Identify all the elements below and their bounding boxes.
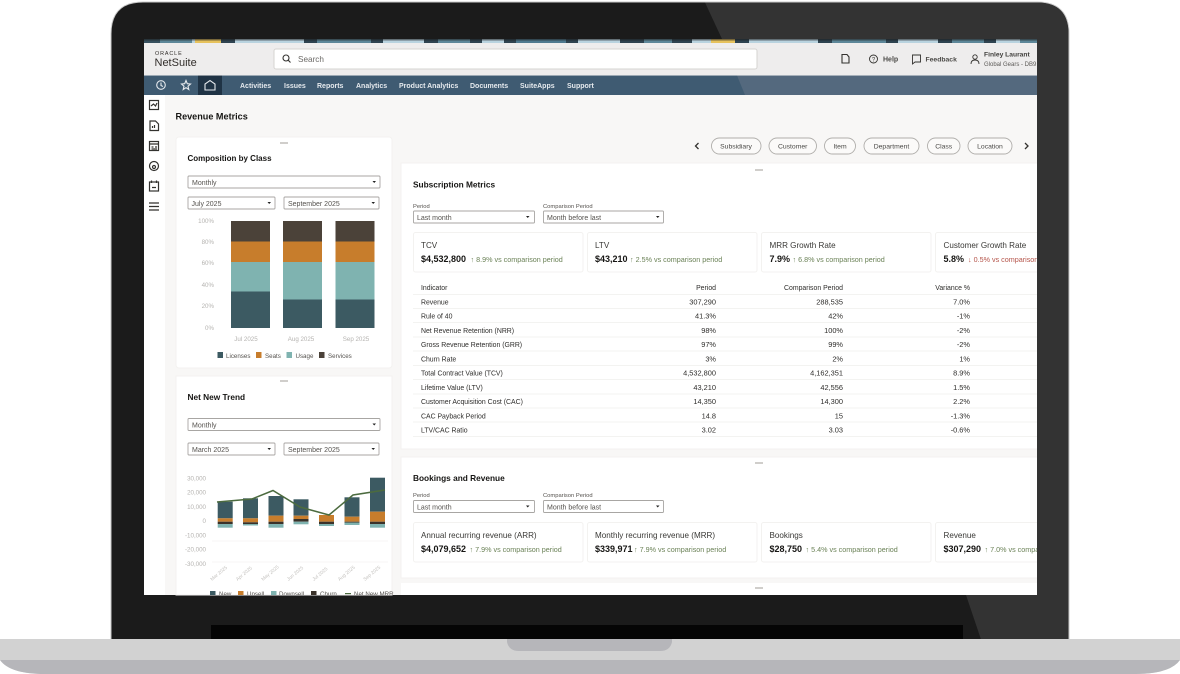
table rows: Lifetime Value (LTV) [421,385,483,392]
table rows: Total Contract Value (TCV) [421,370,503,378]
dropdown: end [284,443,379,455]
KPI card: MRR: Monthly recurring revenue (MRR) [595,531,715,540]
panel: composition by class [176,137,392,368]
period filter: Last month [417,504,452,512]
stacked bar chart: 40% [202,282,214,289]
legend: Usage [296,353,314,360]
period filter: Last month [417,215,452,222]
dropdown: end: September 2025 [288,201,340,208]
panel: net new trend [176,376,394,598]
table rows: -0.6% [951,426,970,434]
nav labels: Documents [470,83,508,90]
period filter [413,204,534,223]
dropdown: start: July 2025 [192,201,222,208]
panel: next section, cut off [401,583,1037,595]
dropdown: start [188,443,275,455]
header bar [144,43,1037,75]
filter pills: Subsidiary [720,144,752,150]
KPI card: LTV: $43,210 [595,254,628,264]
nav labels: Analytics [356,83,387,90]
table rows: Customer Acquisition Cost (CAC) [421,399,523,406]
table rows: 3% [705,354,716,364]
stacked bar chart: 0% [205,325,214,332]
stacked bar chart: 60% [202,260,214,267]
table rows: 41.3% [695,312,716,320]
KPI card: LTV: ↑ 2.5% vs comparison period [630,255,722,264]
nav labels [240,83,594,90]
comparison period filter: Month before last [547,215,601,222]
table rows: Gross Revenue Retention (GRR) [421,342,522,349]
table rows: 14.8 [702,412,716,420]
table rows: -2% [957,326,970,335]
table rows: LTV/CAC Ratio [421,428,468,434]
comparison period filter: Month before last [547,504,601,512]
filter pills [696,138,1028,154]
decorative top banner [144,39,1037,43]
legend, clipped by screen edge: Downsell [279,591,304,598]
stacked bar chart: Aug 2025 [288,336,315,343]
dropdown: frequency [188,176,380,188]
table rows: 288,535 [816,298,843,306]
table rows: 307,290 [689,298,716,306]
filter pills: Customer [778,144,808,150]
help: Help [883,56,898,64]
filter pills: Item [833,144,847,150]
dropdown: end [284,197,379,209]
table rows: 14,350 [693,397,716,406]
stacked bar chart: 100% [198,218,214,225]
table header: Variance % [935,285,970,292]
combo chart: -30,000 [185,561,207,568]
KPI card: customer growth, clipped: ↓ 0.5% vs comparison period [968,255,1060,264]
panel: bookings and revenue [402,458,1037,578]
KPI card: bookings: Bookings [770,531,803,540]
table rows: Rule of 40 [421,314,453,320]
user: Finley Laurant [984,52,1030,58]
legend, clipped by screen edge: New [219,591,232,598]
KPI card: bookings: $28,750 [770,544,802,554]
user [971,52,1037,68]
laptop lid [111,2,1069,640]
stacked bar chart: 20% [202,303,214,310]
line: net new MRR [217,490,385,515]
KPI card: LTV: LTV [595,241,610,250]
combo chart: 0 [203,518,207,525]
combo chart: -10,000 [185,532,207,540]
icon: document [842,54,849,63]
legend, clipped by screen edge [210,591,394,595]
KPI card: TCV: ↑ 8.9% vs comparison period [470,255,563,264]
table rows: 99% [828,340,843,349]
legend [218,352,352,360]
dropdown: frequency: Monthly [192,180,217,187]
table rows: CAC Payback Period [421,414,486,420]
KPI card: MRR growth: ↑ 6.8% vs comparison period [792,255,885,264]
navigation bar [144,76,1037,95]
combo chart [185,476,394,598]
KPI card: ARR: Annual recurring revenue (ARR) [421,531,537,540]
table rows: Revenue [421,300,449,306]
combo chart: 10,000 [187,504,207,511]
nav labels: Activities [240,83,271,90]
month labels [209,564,382,583]
legend: Licenses [226,353,250,360]
filter pills: Department [874,144,909,150]
table rows: 42,556 [820,383,843,392]
logo: ORACLE [155,51,183,57]
KPI card: bookings [762,522,931,562]
table rows: 42% [828,312,843,320]
table rows: 2% [832,354,843,364]
KPI card: customer growth, clipped: 5.8% [944,254,964,264]
heading: Bookings and Revenue [413,473,505,483]
help: ? [872,58,876,64]
table rows: 97% [701,340,716,349]
legend, clipped by screen edge: Churn [320,591,337,598]
filter pills: Class [935,144,953,150]
nav labels: Issues [284,83,306,90]
KPI card: TCV: $4,532,800 [421,254,466,264]
legend: Services [328,353,352,360]
table rows: 1.5% [953,383,970,392]
legend: Seats [265,353,281,360]
screen [144,39,1105,598]
dropdown: start [188,197,275,209]
period filter: Period [413,204,430,210]
table rows: 43,210 [693,383,716,392]
month labels: Aug 2025 [337,565,357,583]
KPI card: revenue, clipped [935,522,1037,562]
KPI card: customer growth, clipped: Customer Growth Rate [944,241,1027,250]
KPI card: revenue, clipped: Revenue [944,531,976,540]
help [870,55,898,64]
nav labels: SuiteApps [520,83,555,90]
heading: Composition by Class [188,154,272,163]
month labels: Sep 2025 [362,565,382,583]
period filter: Period [413,493,430,499]
comparison period filter [543,204,664,223]
month labels: Jun 2025 [286,565,305,583]
table header: Comparison Period [784,285,843,292]
feedback [912,55,957,64]
table rows: Net Revenue Retention (NRR) [421,328,514,335]
KPI card: customer growth, clipped [935,232,1037,272]
table rows: 100% [824,326,843,335]
KPI card: bookings: ↑ 5.4% vs comparison period [806,545,898,554]
KPI card: MRR: $339,971 [595,544,633,554]
comparison period filter [543,493,664,512]
table rows: 3.03 [829,426,843,434]
month labels: Jul 2025 [311,566,329,583]
stacked bar chart: Jul 2025 [234,336,258,343]
month labels: Mar 2025 [209,565,229,583]
table rows: 7.0% [953,298,970,306]
table rows: 15 [835,412,843,420]
table rows: 4,162,351 [810,368,843,378]
dropdown: frequency: Monthly [192,422,217,430]
table rows: 8.9% [953,368,970,378]
filter pills: Location [977,144,1003,150]
table rows: 1% [959,354,970,364]
KPI card: MRR [588,522,757,562]
heading: Subscription Metrics [413,180,495,190]
laptop base [0,639,1180,674]
panel: subscription metrics [402,164,1037,448]
nav labels: Product Analytics [399,83,458,90]
KPI card: MRR growth [762,232,931,272]
table rows: 2.2% [953,397,970,406]
table rows: -1% [957,312,970,320]
KPI card: MRR: ↑ 7.9% vs comparison period [634,545,726,554]
KPI card: ARR: ↑ 7.9% vs comparison period [470,545,562,554]
KPI card: revenue, clipped: $307,290 [944,544,981,554]
indicators table [413,285,1037,436]
search box [274,49,757,69]
table rows: 98% [701,326,716,335]
month labels: May 2025 [260,564,281,583]
table rows: 4,532,800 [683,368,716,378]
user: Global Gears - DB9 [984,62,1037,68]
comparison period filter: Comparison Period [543,493,593,499]
KPI card: revenue, clipped: ↑ 7.0% vs comparison period [984,545,1077,554]
table rows: 3.02 [702,426,716,434]
stacked bar chart: Sep 2025 [343,336,370,343]
table header: Indicator [421,285,448,292]
comparison period filter: Comparison Period [543,204,593,210]
KPI card: ARR [414,522,583,562]
combo chart: 20,000 [187,490,207,496]
legend, clipped by screen edge: Upsell [247,591,264,598]
bars [218,478,385,528]
period filter [413,493,534,512]
stacked bar chart [198,218,374,343]
month labels: Apr 2025 [235,565,254,583]
table header: Period [696,285,716,292]
dropdown: end: September 2025 [288,447,340,454]
KPI card: MRR growth: 7.9% [770,254,790,264]
sidebar [144,95,165,595]
combo chart: -20,000 [185,546,207,554]
KPI card: LTV [588,232,757,272]
KPI card: MRR growth: MRR Growth Rate [770,241,836,250]
combo chart: 30,000 [187,476,207,482]
table rows: -2% [957,340,970,349]
legend, clipped by screen edge: Net New MRR [354,591,394,598]
dropdown: frequency [188,418,380,430]
logo: NetSuite [154,57,197,69]
table rows: -1.3% [951,412,970,420]
stacked bar chart: 80% [202,239,214,246]
table header [421,285,970,292]
page title: Revenue Metrics [176,112,248,122]
logo [154,51,197,69]
search box: Search [298,55,324,64]
table rows: Churn Rate [421,356,456,364]
dropdown: start: March 2025 [192,447,229,454]
nav labels: Reports [317,83,344,90]
heading: Net New Trend [188,392,245,402]
table rows [421,298,970,434]
table rows: 14,300 [820,397,843,406]
KPI card: ARR: $4,079,652 [421,544,466,554]
nav labels: Support [567,83,594,90]
feedback: Feedback [926,56,957,64]
KPI card: TCV: TCV [421,241,438,250]
KPI card: TCV [414,232,583,272]
nav icons [157,80,215,90]
